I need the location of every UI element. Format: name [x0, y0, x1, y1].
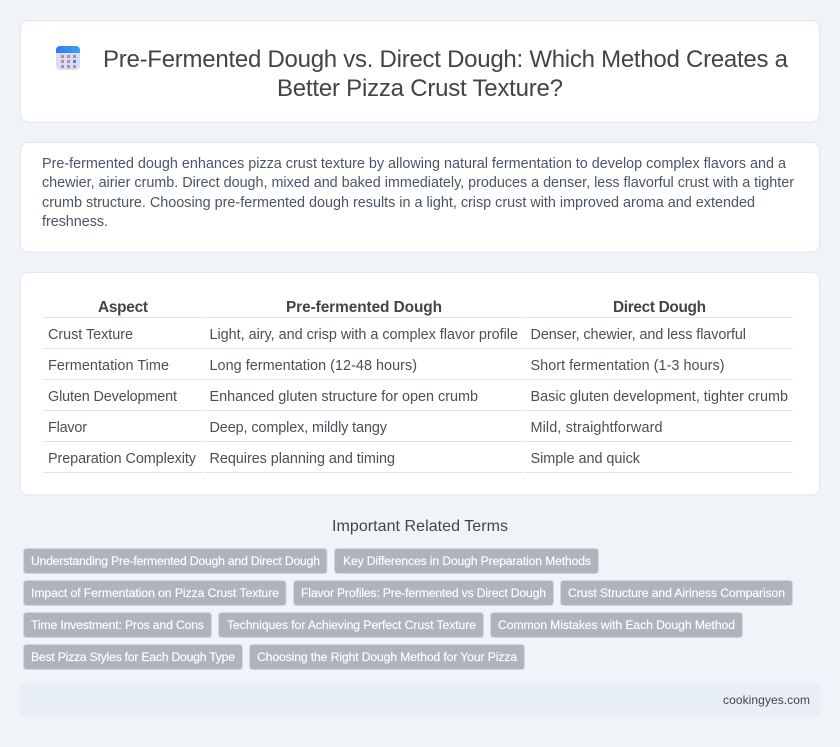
text block: description: crumb structure. Choosing pre-fermented dough results in a light, crisp crust with improved aroma and extended	[42, 195, 755, 211]
table header: Pre-fermented Dough	[286, 299, 442, 316]
tag: Common Mistakes with Each Dough Method	[498, 618, 735, 632]
tag: Best Pizza Styles for Each Dough Type	[31, 650, 235, 664]
tag: Choosing the Right Dough Method for Your Pizza	[257, 650, 517, 664]
table row: crust texture: Crust Texture	[48, 327, 133, 343]
table row: gluten development: Basic gluten development, tighter crumb	[530, 389, 788, 405]
tag: Crust Structure and Airiness Comparison	[568, 586, 785, 600]
text block: description	[42, 156, 794, 230]
table row: fermentation time: Long fermentation (12-48 hours)	[210, 358, 417, 374]
footer	[20, 683, 820, 717]
panel: description	[20, 142, 820, 252]
text block: description: Pre-fermented dough enhances pizza crust texture by allowing natural fermentation to develop complex flavors and a	[42, 156, 786, 172]
tag	[24, 580, 286, 606]
tag: Time Investment: Pros and Cons	[31, 618, 204, 632]
table header: Direct Dough	[613, 299, 706, 316]
table row: preparation complexity	[43, 451, 793, 473]
related terms tags	[24, 548, 792, 670]
title	[103, 46, 789, 102]
panel: header	[20, 20, 820, 122]
tag	[490, 612, 742, 638]
table row: crust texture: Denser, chewier, and less flavorful	[530, 327, 746, 343]
tag	[250, 644, 524, 670]
table row: gluten development	[43, 389, 793, 411]
table row: flavor	[43, 420, 793, 442]
icon: calendar	[56, 46, 80, 70]
tag: Key Differences in Dough Preparation Methods	[343, 554, 591, 568]
table row: gluten development: Enhanced gluten structure for open crumb	[210, 389, 478, 405]
table row: gluten development: Gluten Development	[48, 389, 177, 405]
table row: preparation complexity: Preparation Complexity	[48, 451, 197, 467]
tag	[24, 644, 242, 670]
tag	[560, 580, 792, 606]
tag: Techniques for Achieving Perfect Crust Texture	[227, 618, 476, 632]
tag	[24, 548, 327, 574]
table row: crust texture: Light, airy, and crisp with a complex flavor profile	[210, 327, 518, 343]
panel: comparison table	[20, 272, 820, 495]
tag	[294, 580, 554, 606]
table row: preparation complexity: Requires planning and timing	[210, 451, 395, 467]
text block: description: chewier, airier crumb. Direct dough, mixed and baked immediately, produces a denser, less flavorful crust with a tighter	[42, 175, 794, 191]
tag: Understanding Pre-fermented Dough and Direct Dough	[31, 554, 320, 568]
title: Better Pizza Crust Texture?	[277, 75, 563, 102]
tag	[24, 612, 212, 638]
table header	[43, 299, 793, 318]
table header: Aspect	[98, 299, 148, 316]
tag: Flavor Profiles: Pre-fermented vs Direct Dough	[301, 586, 546, 600]
table row: fermentation time: Short fermentation (1-3 hours)	[530, 358, 724, 374]
table row: flavor: Deep, complex, mildly tangy	[210, 420, 388, 436]
tag: Impact of Fermentation on Pizza Crust Texture	[31, 586, 279, 600]
tag	[218, 612, 484, 638]
table row: fermentation time: Fermentation Time	[48, 358, 169, 374]
heading: important related terms: Important Related Terms	[332, 518, 508, 535]
text block: description: freshness.	[42, 214, 108, 230]
title: Pre-Fermented Dough vs. Direct Dough: Which Method Creates a	[103, 46, 789, 73]
table row: fermentation time	[43, 358, 793, 380]
table row: crust texture	[43, 327, 793, 349]
tag	[334, 548, 598, 574]
footer: cookingyes.com	[723, 693, 810, 707]
table row: flavor: Mild, straightforward	[530, 420, 662, 436]
table row: preparation complexity: Simple and quick	[530, 451, 641, 467]
table row: flavor: Flavor	[48, 420, 87, 436]
